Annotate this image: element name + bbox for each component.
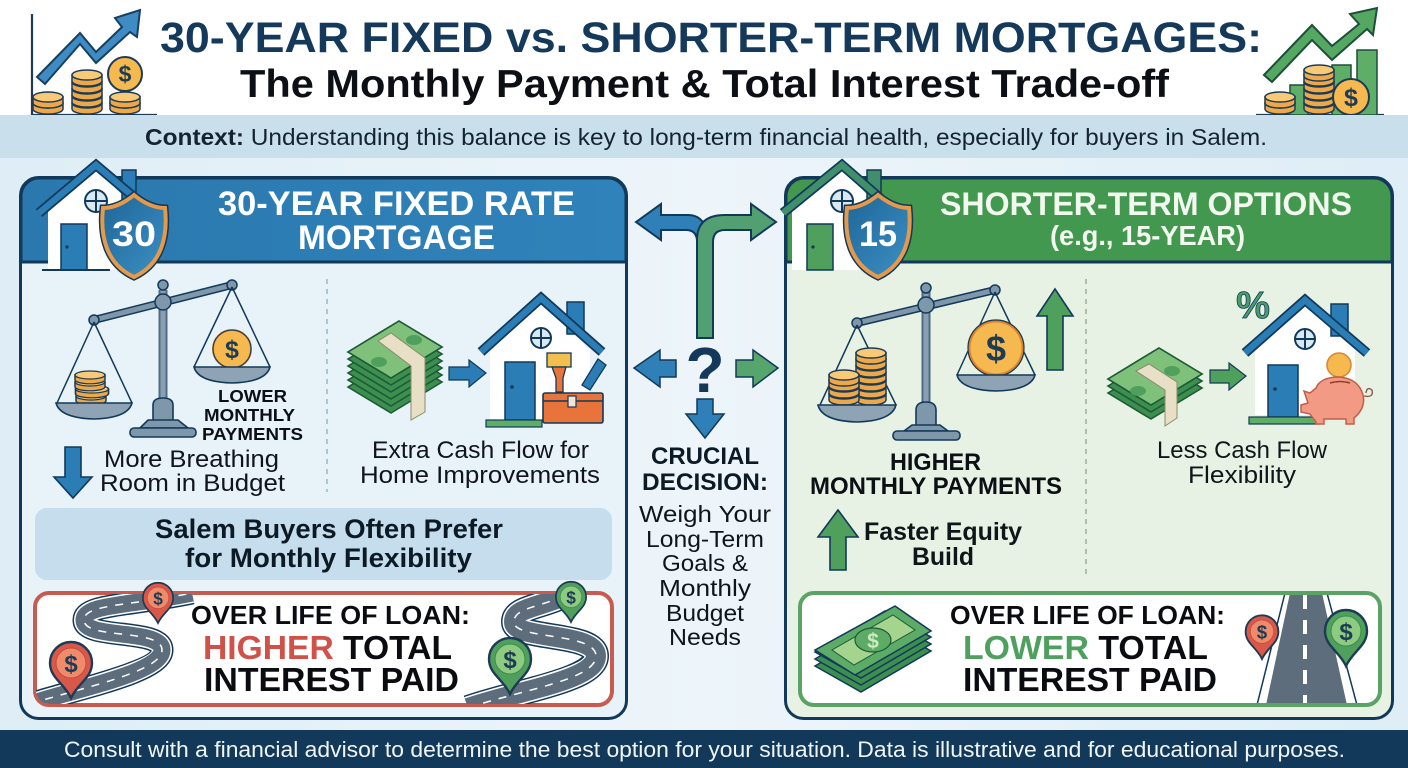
icon: down arrow	[54, 447, 92, 498]
icon: question mark: ?	[685, 334, 725, 406]
central decision column	[634, 204, 778, 650]
panel: shorter-term options	[783, 165, 1392, 718]
icon: green pin: $	[1339, 619, 1353, 646]
text: over life of loan right: OVER LIFE OF LOAN:	[950, 600, 1225, 630]
icon: left arrow	[634, 350, 676, 387]
icon: green pin small	[556, 582, 586, 622]
text: crucial decision: Needs	[669, 624, 741, 650]
icon: house with 15 shield	[783, 165, 910, 277]
label: lower monthly payments: MONTHLY	[204, 405, 295, 425]
text: crucial decision	[639, 443, 771, 650]
icon: balance scale higher payment	[818, 283, 1035, 440]
icon: house with toolbox	[481, 298, 606, 427]
icon: straight road	[1257, 593, 1357, 705]
icon: up arrow	[1037, 289, 1073, 370]
icon: small cash stack	[1108, 348, 1202, 426]
icon: red pin small	[143, 583, 173, 623]
icon: rising arrow with coin stacks: $	[119, 61, 132, 87]
icon: winding road right	[468, 590, 596, 708]
text: more breathing room in budget: More Breathing	[104, 446, 279, 473]
text: faster equity build	[864, 518, 1022, 571]
panel: 30-year fixed rate mortgage	[20, 165, 626, 718]
text: extra cash flow: Extra Cash Flow for	[372, 437, 589, 464]
icon: house with 30 shield: 30	[112, 215, 156, 254]
text: over life of loan right: INTEREST PAID	[963, 661, 1217, 698]
panel header: shorter-term	[786, 178, 1392, 262]
icon: green pin large: $	[503, 647, 517, 674]
text: crucial decision: CRUCIAL	[651, 443, 759, 470]
text: crucial decision: DECISION:	[642, 469, 768, 496]
icon: percent sign: %	[1236, 285, 1270, 327]
text: crucial decision: Budget	[666, 600, 744, 626]
text: more breathing room in budget	[100, 446, 285, 497]
panel header: shorter-term: SHORTER-TERM OPTIONS	[940, 186, 1352, 222]
label: higher monthly payments: HIGHER	[890, 449, 981, 476]
icon: rising arrow with coin stacks	[32, 10, 157, 115]
panel header: shorter-term: (e.g., 15-YEAR)	[1050, 220, 1245, 251]
context band	[0, 115, 1408, 158]
text: crucial decision: Long-Term	[646, 526, 764, 552]
icon: red pin	[1246, 615, 1278, 659]
icon: green pin large	[489, 638, 531, 694]
icon: red pin: $	[1257, 622, 1268, 643]
text: extra cash flow	[360, 437, 600, 489]
label: higher monthly payments: MONTHLY PAYMENTS	[810, 473, 1062, 500]
text: over life of loan left: OVER LIFE OF LOAN:	[191, 600, 470, 630]
text: over life of loan right: LOWER TOTAL	[963, 629, 1208, 666]
icon: flat cash stack: $	[867, 630, 879, 653]
title: The Monthly Payment & Total Interest Trade-off	[240, 63, 1170, 106]
text: over life of loan left: HIGHER TOTAL	[203, 629, 452, 666]
icon: red pin large: $	[64, 651, 78, 678]
footer band	[0, 730, 1408, 768]
text: more breathing room in budget: Room in Budget	[100, 470, 285, 497]
label: higher monthly payments	[810, 449, 1062, 500]
panel header: 30-year: 30-YEAR FIXED RATE	[218, 185, 575, 223]
icon: house with 30 shield	[39, 165, 166, 277]
callout band: Salem buyers	[35, 508, 612, 580]
icon: down arrow	[686, 399, 724, 438]
callout: lower total interest	[800, 593, 1380, 705]
label: lower monthly payments: PAYMENTS	[202, 424, 303, 444]
text: extra cash flow: Home Improvements	[360, 462, 600, 489]
panel header: 30-year	[21, 178, 626, 262]
context band: Context: Understanding this balance is key to long-term financial health, especially for buyers in Salem.	[145, 124, 1267, 150]
icon: up arrow small	[818, 510, 858, 570]
icon: flat cash stack	[815, 606, 931, 692]
text: faster equity build: Faster Equity	[864, 518, 1022, 546]
label: lower monthly payments: LOWER	[218, 386, 287, 406]
text: over life of loan left: INTEREST PAID	[204, 661, 459, 698]
icon: rising arrow with bars and coins	[1256, 8, 1384, 115]
icon: balance scale higher payment: $	[986, 328, 1006, 369]
icon: balance scale lower payment	[56, 280, 270, 437]
title: 30-YEAR FIXED vs. SHORTER-TERM MORTGAGES:	[160, 14, 1262, 62]
icon: winding road left	[30, 593, 192, 704]
callout band: Salem buyers: for Monthly Flexibility	[185, 543, 472, 573]
text: less cash flow flexibility: Less Cash Flow	[1157, 437, 1327, 464]
text: less cash flow flexibility	[1157, 437, 1327, 489]
text: over life of loan right	[950, 600, 1225, 698]
text: crucial decision: Monthly	[659, 575, 751, 601]
text: faster equity build: Build	[912, 543, 974, 571]
icon: red pin large	[50, 642, 92, 698]
icon: right arrow	[736, 350, 778, 387]
icon: balance scale lower payment: $	[225, 336, 239, 364]
icon: green pin small: $	[566, 587, 576, 607]
icon: forked arrows	[636, 204, 776, 338]
text: crucial decision: Goals &	[662, 550, 748, 576]
icon: cash stack	[348, 321, 442, 420]
callout band: Salem buyers: Salem Buyers Often Prefer	[155, 514, 503, 544]
icon: rising arrow with bars and coins: $	[1344, 84, 1358, 112]
icon: green arrow to house	[1210, 363, 1246, 390]
icon: red pin small: $	[153, 588, 163, 608]
icon: arrow to house	[449, 360, 486, 387]
text: over life of loan left	[191, 600, 470, 698]
footer band: Consult with a financial advisor to determine the best option for your situation. Data is illustrative and for educational purposes.	[64, 737, 1345, 762]
label: lower monthly payments	[202, 386, 303, 444]
icon: house with 15 shield: 15	[859, 215, 897, 254]
panel header: 30-year: MORTGAGE	[298, 219, 495, 257]
icon: house with piggy bank	[1245, 300, 1372, 424]
title	[160, 14, 1262, 106]
header band	[0, 0, 1408, 115]
callout: higher total interest	[30, 582, 612, 708]
icon: green pin	[1325, 610, 1367, 666]
text: crucial decision: Weigh Your	[639, 501, 771, 527]
text: less cash flow flexibility: Flexibility	[1188, 462, 1297, 489]
